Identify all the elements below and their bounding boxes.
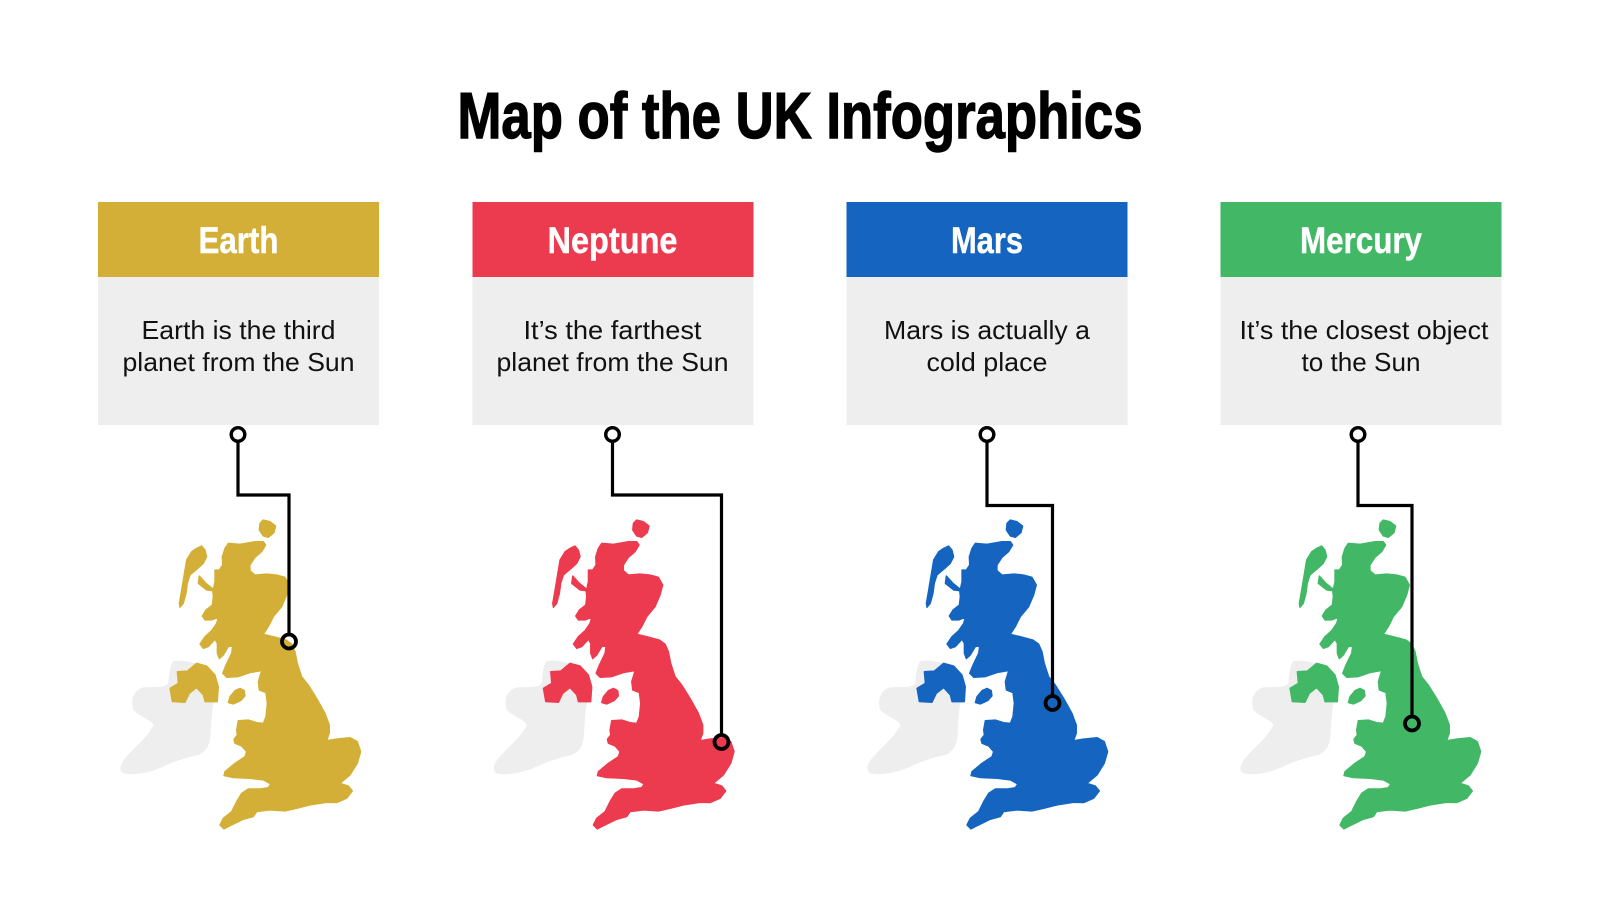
description: Mars [884,315,1091,377]
description: Mars: cold place [926,347,1048,377]
panel: Mercury [1220,202,1502,829]
connector: Mercury [1351,428,1419,730]
header: Earth [98,202,379,277]
description: Earth [122,315,354,377]
title: Map of the UK Infographics [458,79,1142,152]
connector: Earth [231,428,296,648]
card body: Earth [98,277,379,425]
description: Neptune [496,315,728,377]
description: Mercury [1240,315,1489,377]
connector: Mars [980,428,1060,710]
description: Neptune: planet from the Sun [496,347,728,377]
description: Earth: Earth is the third [142,315,336,345]
connector: Neptune [606,428,728,749]
map: Neptune [494,520,734,829]
card body: Mars [846,277,1128,425]
panel: Earth [98,202,379,829]
description: Earth: planet from the Sun [122,347,354,377]
header: Mars: Mars [951,220,1023,261]
header: Neptune [472,202,754,277]
header: Mercury: Mercury [1300,220,1422,261]
panel: Neptune [472,202,754,829]
header: Mars [846,202,1128,277]
card body: Neptune [472,277,754,425]
card body: Mercury [1220,277,1502,425]
map: Mercury [1240,520,1481,829]
header: Mercury [1220,202,1502,277]
map: Mars [867,520,1108,829]
header: Neptune: Neptune [548,220,678,261]
description: Mercury: to the Sun [1302,347,1420,377]
description: Mars: Mars is actually a [884,315,1091,345]
panel: Mars [846,202,1128,829]
description: Neptune: It’s the farthest [524,315,702,345]
map: Earth [120,520,361,829]
header: Earth: Earth [198,220,278,261]
description: Mercury: It’s the closest object [1240,315,1489,345]
